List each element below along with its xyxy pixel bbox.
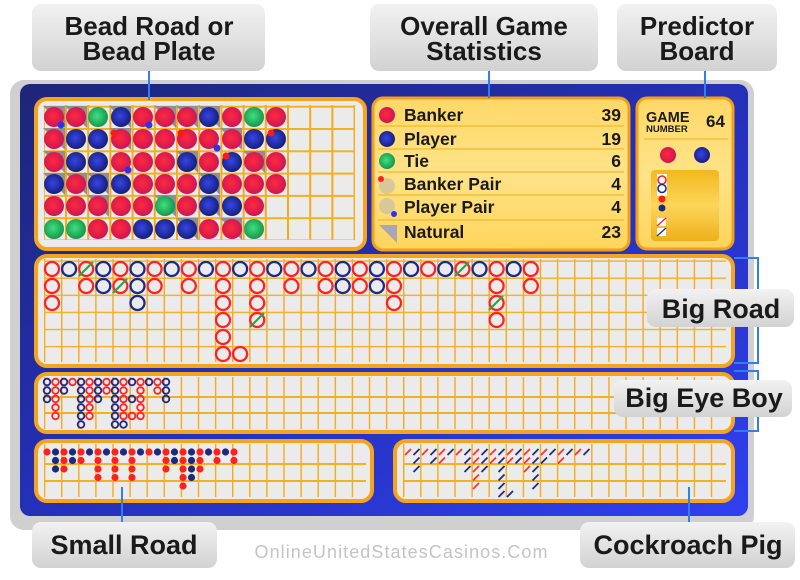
panel: predictor board: NUMBER bbox=[646, 124, 688, 135]
panel: big eye boy bbox=[36, 374, 733, 432]
stats text: Player Pair bbox=[404, 197, 495, 217]
label: bead road bbox=[32, 4, 265, 71]
predictor icons bbox=[657, 174, 667, 236]
label: overall game statistics: Statistics bbox=[426, 36, 542, 66]
label: small road: Small Road bbox=[50, 530, 198, 560]
pair dots bbox=[58, 122, 274, 174]
natural triangles bbox=[43, 106, 265, 240]
cockroach slashes bbox=[405, 449, 590, 497]
watermark: OnlineUnitedStatesCasinos.Com bbox=[254, 542, 548, 562]
stats text: 23 bbox=[602, 222, 621, 242]
connector lines bbox=[122, 71, 758, 524]
stats text bbox=[404, 105, 621, 242]
panel: predictor board: GAME bbox=[646, 110, 690, 126]
panel: cockroach pig bbox=[395, 441, 733, 501]
stats text: 19 bbox=[602, 129, 621, 149]
stats text: Banker bbox=[404, 105, 464, 125]
label: predictor board bbox=[617, 4, 777, 71]
label: overall game statistics: Overall Game bbox=[400, 11, 568, 41]
label: big road bbox=[647, 289, 794, 327]
panel: bead plate bbox=[36, 99, 365, 249]
panel: small road bbox=[36, 441, 372, 501]
label: cockroach pig bbox=[580, 522, 795, 568]
stats text: 4 bbox=[611, 197, 621, 217]
stats text: 6 bbox=[611, 151, 621, 171]
board frame bbox=[10, 80, 754, 530]
label: overall game statistics bbox=[370, 4, 598, 71]
bead balls bbox=[44, 107, 286, 239]
small road dots bbox=[43, 448, 238, 490]
label: cockroach pig: Cockroach Pig bbox=[593, 530, 783, 560]
label: big eye boy: Big Eye Boy bbox=[625, 383, 783, 413]
panel: big road bbox=[36, 256, 733, 366]
stats text: Player bbox=[404, 129, 457, 149]
label: bead road: Bead Plate bbox=[83, 36, 215, 66]
panel: predictor board: 64 bbox=[706, 112, 725, 131]
label: predictor board: Predictor bbox=[640, 11, 754, 41]
stats text: Natural bbox=[404, 222, 464, 242]
label: bead road: Bead Road or bbox=[64, 11, 234, 41]
stats text: Tie bbox=[404, 151, 429, 171]
label: big road: Big Road bbox=[662, 294, 780, 324]
panel: overall game statistics bbox=[373, 98, 629, 250]
big road circles bbox=[45, 262, 538, 361]
stats icons bbox=[378, 107, 397, 243]
stats text: 4 bbox=[611, 174, 621, 194]
big eye boy marks bbox=[44, 379, 169, 428]
label: predictor board: Board bbox=[659, 36, 735, 66]
stats text: Banker Pair bbox=[404, 174, 501, 194]
panel: predictor board bbox=[637, 98, 733, 249]
stats text: 39 bbox=[602, 105, 621, 125]
label: small road bbox=[32, 522, 217, 568]
